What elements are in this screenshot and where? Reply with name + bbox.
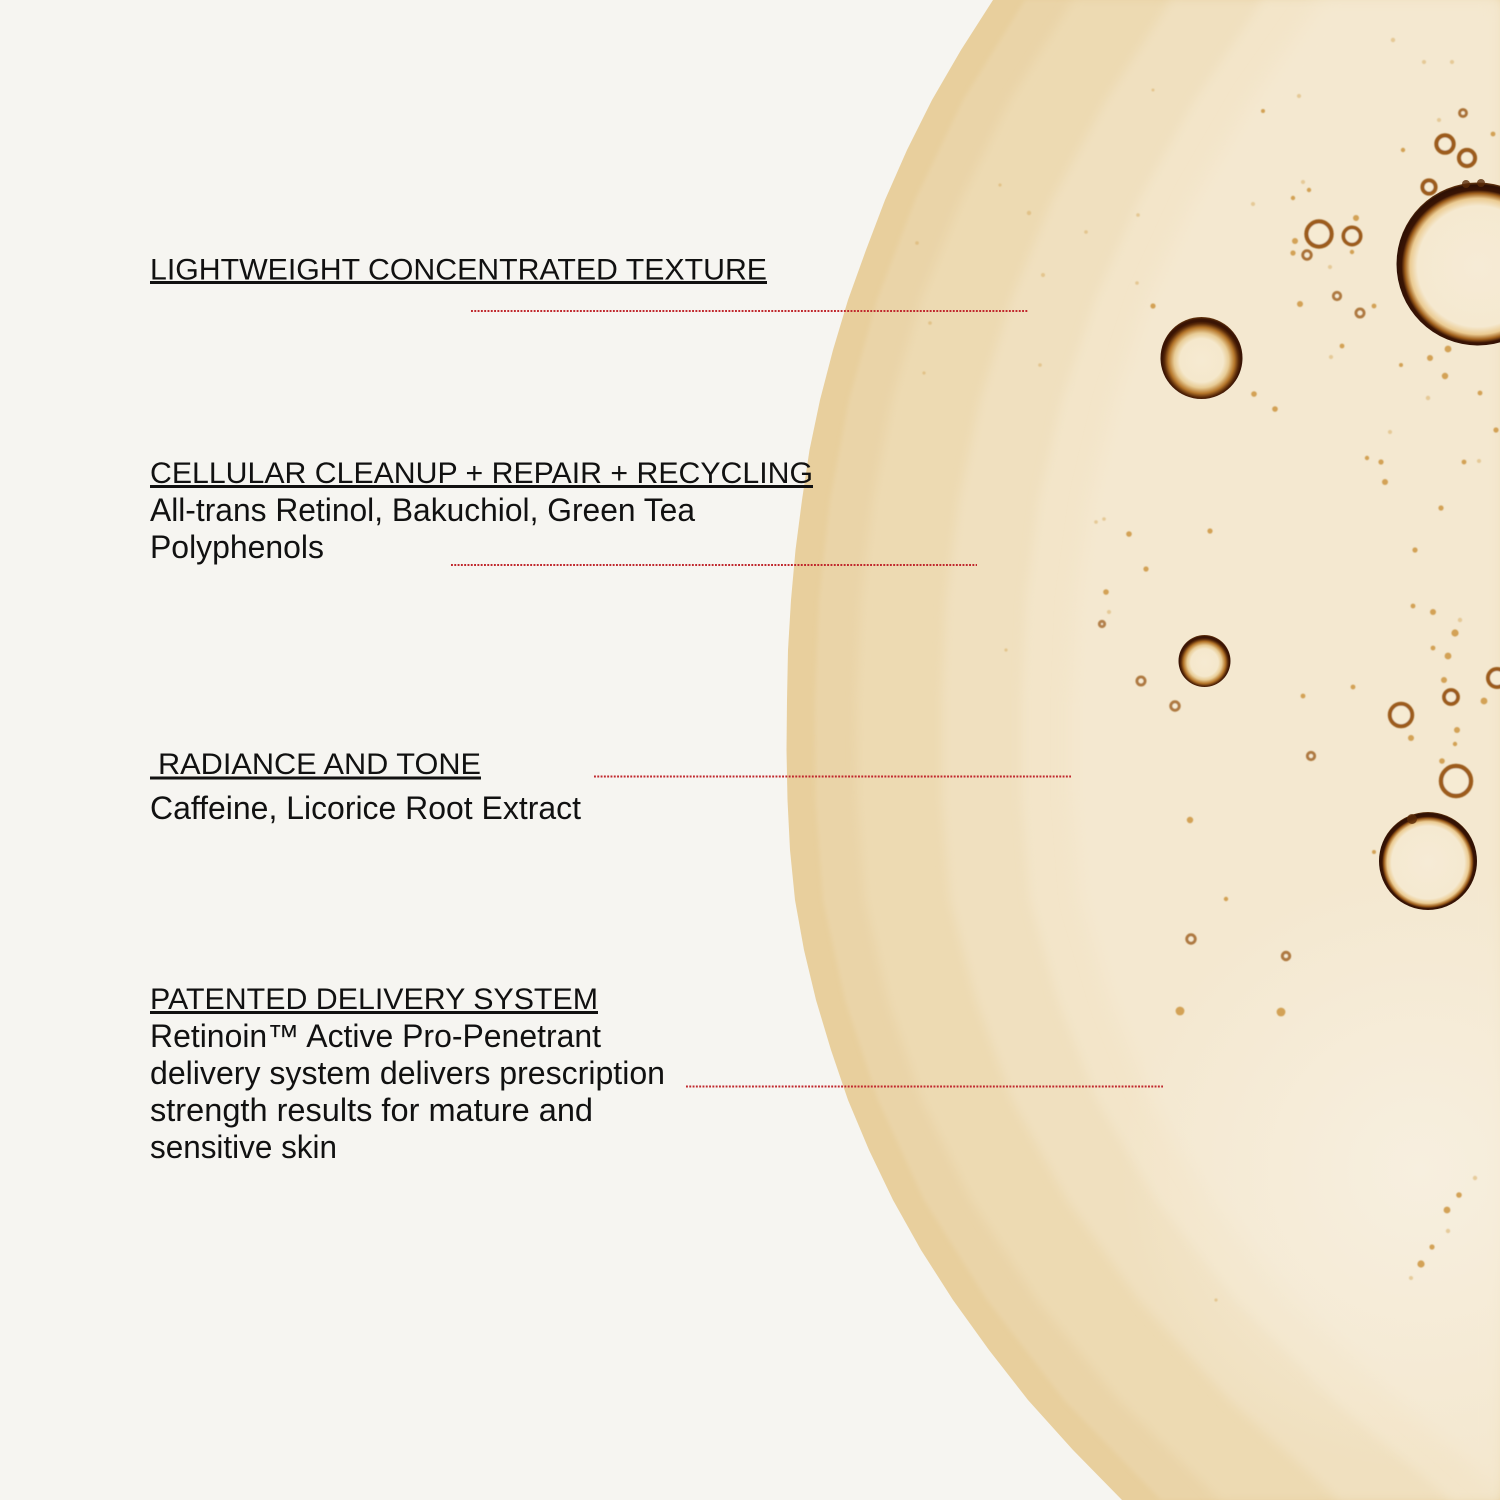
- text block: radiance and tone: RADIANCE AND TONE: [158, 748, 481, 781]
- text block: cellular cleanup: CELLULAR CLEANUP + REPAIR + RECYCLING: [150, 457, 813, 490]
- disc band 4: [942, 0, 1500, 1500]
- disc outer band: [786, 0, 1500, 1500]
- text block: cellular cleanup: All-trans Retinol, Bakuchiol, Green Tea: [150, 492, 695, 528]
- disc band 5: [1022, 0, 1500, 1500]
- text block: patented delivery system: Retinoin™ Active Pro-Penetrant: [150, 1018, 601, 1054]
- large bubbles: [1160, 179, 1500, 910]
- leader line 2: [451, 564, 977, 566]
- text block: lightweight texture: LIGHTWEIGHT CONCENTRATED TEXTURE: [150, 254, 767, 286]
- leader line 4: [686, 1086, 1163, 1088]
- leader line 1: [471, 310, 1028, 312]
- text block: cellular cleanup: Polyphenols: [150, 529, 324, 565]
- disc highlight: [1120, 870, 1500, 1470]
- disc band 3: [857, 0, 1500, 1500]
- tiny oil droplets: [1103, 109, 1499, 1268]
- text block: patented delivery system: delivery system delivers prescription: [150, 1055, 665, 1091]
- text block: patented delivery system: PATENTED DELIVERY SYSTEM: [150, 983, 598, 1016]
- text block: radiance and tone: [150, 748, 581, 826]
- small ring bubbles: [1099, 110, 1500, 960]
- serum droplet disc: [786, 0, 1500, 1500]
- text block: radiance and tone: Caffeine, Licorice Root Extract: [150, 790, 581, 826]
- leader line 3: [594, 776, 1071, 778]
- text block: patented delivery system: [150, 983, 665, 1165]
- faint droplets: [915, 38, 1481, 1302]
- disc centre: [1072, 0, 1500, 1490]
- text block: cellular cleanup: [150, 457, 813, 565]
- text block: patented delivery system: sensitive skin: [150, 1129, 337, 1165]
- text block: patented delivery system: strength results for mature and: [150, 1092, 593, 1128]
- disc band 2: [815, 0, 1500, 1500]
